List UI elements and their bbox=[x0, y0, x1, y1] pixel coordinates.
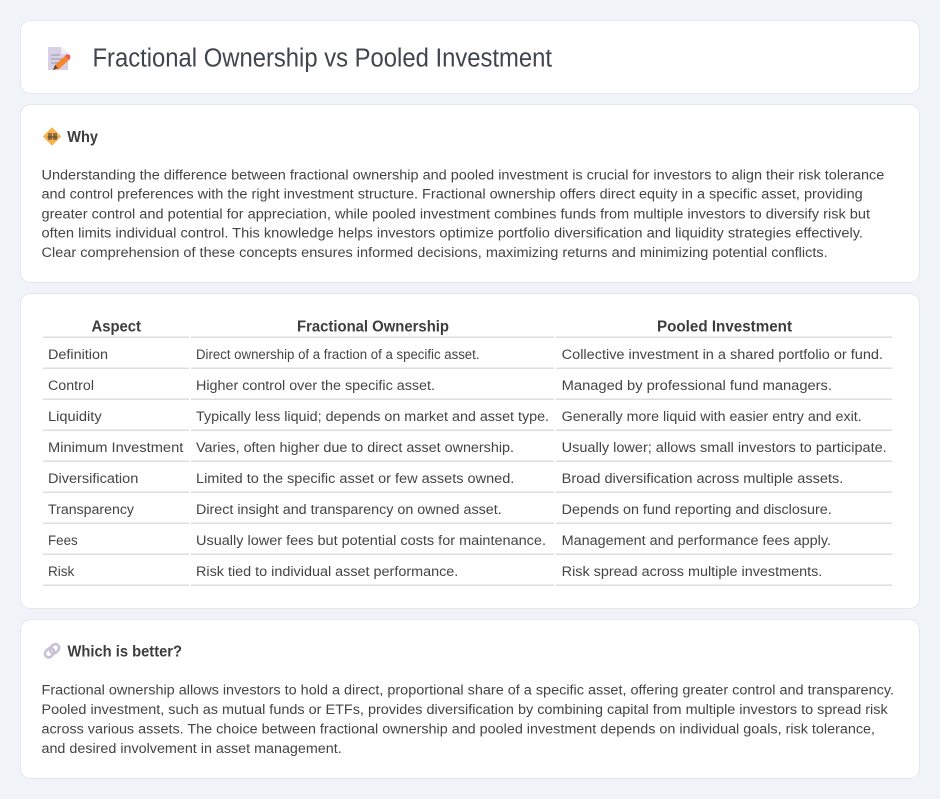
row: transparency: Depends on fund reporting and disclosure. bbox=[562, 502, 832, 518]
table header: Fractional Ownership bbox=[297, 318, 449, 336]
text block: why: Understanding the difference between fractional ownership and pooled investment is crucial for investors to align their risk tolerance bbox=[42, 167, 884, 183]
row: fees: Fees bbox=[48, 533, 78, 549]
row: liquidity: Liquidity bbox=[48, 409, 103, 425]
text block: why: Clear comprehension of these concepts ensures informed decisions, maximizing returns and minimizing potential conflicts. bbox=[42, 245, 828, 261]
table header: Aspect bbox=[92, 318, 142, 336]
row: diversification: Broad diversification across multiple assets. bbox=[562, 471, 843, 487]
row: control bbox=[43, 378, 892, 400]
text block: which is better: across various assets. The choice between fractional ownership and pooled investment depends on individual goals, risk tolerance, bbox=[42, 721, 875, 737]
row: liquidity bbox=[43, 409, 892, 431]
row: transparency: Direct insight and transparency on owned asset. bbox=[196, 502, 502, 518]
row: fees bbox=[43, 533, 892, 555]
table header: Pooled Investment bbox=[657, 318, 793, 336]
row: transparency bbox=[43, 502, 892, 524]
row: minimum investment bbox=[43, 440, 892, 462]
text block: which is better: Fractional ownership allows investors to hold a direct, proportional share of a specific asset, offering greater control and transparency. bbox=[42, 682, 894, 698]
text block: which is better bbox=[42, 682, 894, 757]
row: definition: Direct ownership of a fraction of a specific asset. bbox=[196, 347, 480, 363]
row: diversification bbox=[43, 471, 892, 493]
heading: why: Why bbox=[67, 129, 98, 146]
row: liquidity: Generally more liquid with easier entry and exit. bbox=[562, 409, 862, 425]
panel: which is better bbox=[20, 620, 920, 778]
text block: why: greater control and potential for appreciation, while pooled investment combines funds from multiple investors to diversify risk but bbox=[42, 206, 870, 222]
heading: which is better: Which is better? bbox=[68, 644, 182, 661]
row: risk: Risk spread across multiple investments. bbox=[562, 564, 822, 580]
row: risk: Risk tied to individual asset performance. bbox=[196, 564, 458, 580]
text block: why: often limits individual control. This knowledge helps investors optimize portfolio diversification and liquidity strategies effectively. bbox=[42, 226, 863, 242]
icon: diamond sign bbox=[44, 128, 60, 145]
row: diversification: Limited to the specific asset or few assets owned. bbox=[196, 471, 514, 487]
row: minimum investment: Minimum Investment bbox=[48, 440, 183, 456]
panel: header bbox=[20, 20, 920, 94]
row: control: Higher control over the specific asset. bbox=[196, 378, 435, 394]
row: diversification: Diversification bbox=[48, 471, 138, 487]
row: fees: Usually lower fees but potential costs for maintenance. bbox=[196, 533, 546, 549]
row: risk: Risk bbox=[48, 564, 75, 580]
row: definition: Collective investment in a shared portfolio or fund. bbox=[562, 347, 883, 363]
title: Fractional Ownership vs Pooled Investment bbox=[92, 45, 552, 73]
row: risk bbox=[43, 564, 892, 586]
icon: document with pencil bbox=[48, 47, 70, 70]
row: fees: Management and performance fees apply. bbox=[562, 533, 831, 549]
row: definition bbox=[43, 347, 892, 369]
icon: chain link bbox=[43, 643, 61, 659]
text block: why: and control preferences with the right investment structure. Fractional ownership offers direct equity in a specific asset, providing bbox=[42, 187, 863, 203]
text block: why bbox=[42, 167, 884, 261]
row: liquidity: Typically less liquid; depends on market and asset type. bbox=[196, 409, 549, 425]
row: control: Managed by professional fund managers. bbox=[562, 378, 832, 394]
row: control: Control bbox=[48, 378, 94, 394]
panel: comparison table bbox=[20, 294, 920, 608]
text block: which is better: and desired involvement in asset management. bbox=[42, 741, 342, 757]
row: definition: Definition bbox=[48, 347, 108, 363]
text block: which is better: Pooled investment, such as mutual funds or ETFs, provides diversification by combining capital from multiple investors to spread risk bbox=[42, 702, 889, 718]
row: minimum investment: Varies, often higher due to direct asset ownership. bbox=[196, 440, 514, 456]
table header bbox=[43, 318, 892, 338]
row: minimum investment: Usually lower; allows small investors to participate. bbox=[562, 440, 887, 456]
panel: why bbox=[20, 104, 920, 282]
row: transparency: Transparency bbox=[48, 502, 135, 518]
